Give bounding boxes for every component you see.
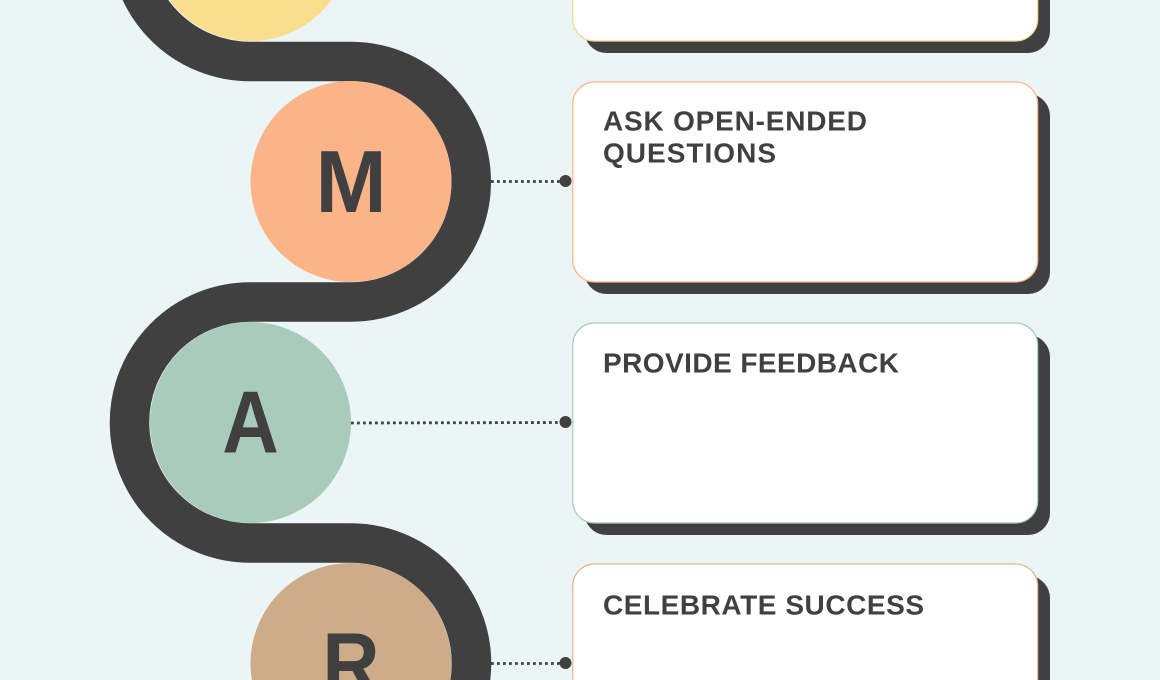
step circle: R [250,563,452,680]
step circle: A [150,322,351,523]
heading: ask open-ended questions [603,106,867,168]
heading: provide feedback: PROVIDE FEEDBACK [603,348,899,378]
panel: ask open-ended questions [573,82,1050,294]
letter M: M [315,134,387,231]
heading: celebrate success: CELEBRATE SUCCESS [603,590,924,620]
panel: top card [573,0,1050,53]
panel: provide feedback [573,323,1050,535]
panel: celebrate success [573,564,1050,680]
heading: ask open-ended questions: QUESTIONS [603,138,776,168]
letter A: A [222,373,279,472]
step circle: M [250,81,452,282]
connector: M [491,175,572,187]
connector: A [351,416,572,428]
connector: R [491,657,572,669]
step circle: yellow [150,0,351,41]
heading: ask open-ended questions: ASK OPEN-ENDED [603,106,867,136]
winding path [129,0,472,680]
